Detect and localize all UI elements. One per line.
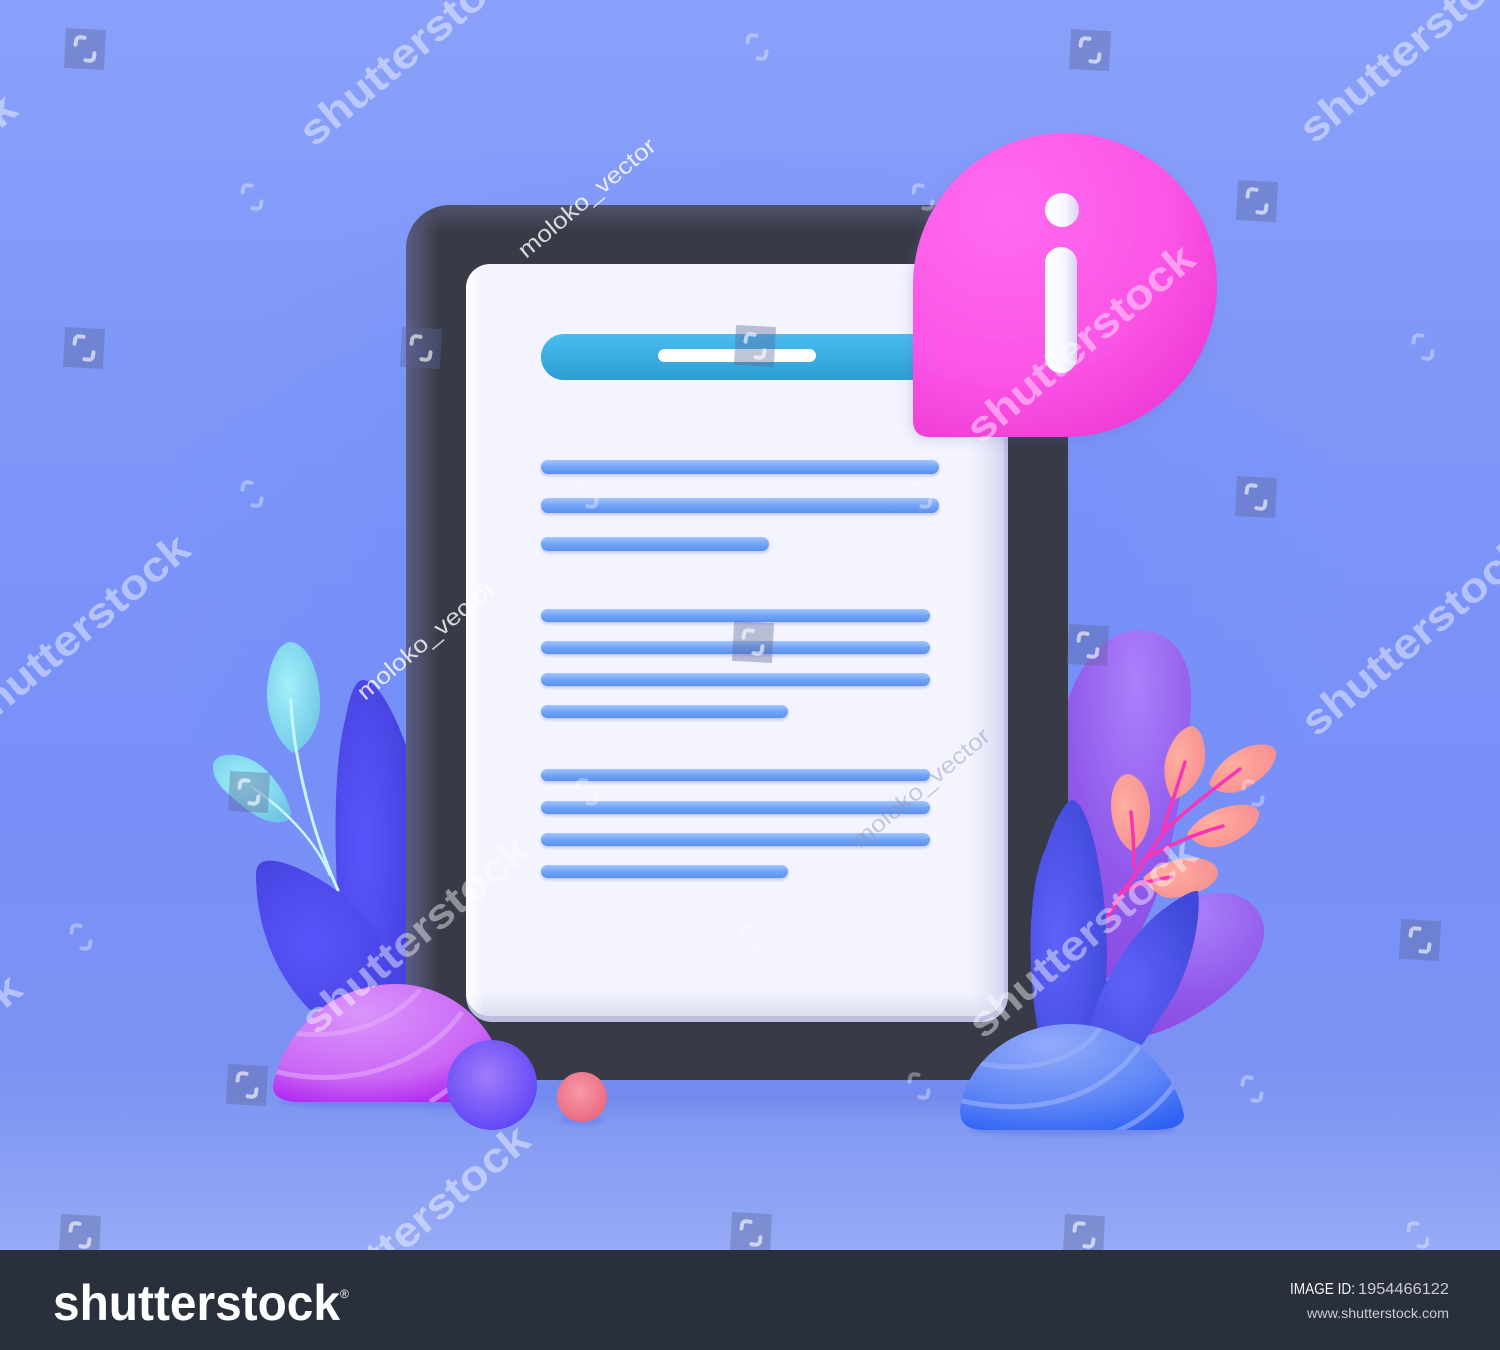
pink branch: [1108, 726, 1276, 917]
icon: letter i stem: [1045, 247, 1077, 373]
blue leaf tilted: [1090, 891, 1199, 1045]
text lines block 3: [541, 769, 930, 878]
tablet frame: [406, 205, 1068, 1080]
moloko_vector watermark text: moloko_vector: [513, 132, 661, 263]
blue rock: [958, 1024, 1184, 1136]
cyan leaf left: [213, 755, 291, 822]
shutterstock watermark text: shutterstock: [959, 829, 1206, 1047]
shutterstock watermark text: shutterstock: [292, 1115, 539, 1333]
left plant: [213, 642, 395, 1010]
left tall blue leaf: [336, 680, 406, 985]
shutterstock watermark text: shutterstock: [292, 825, 539, 1043]
salmon leaves: [1111, 726, 1276, 898]
image id number: 1954466122: [1358, 1281, 1449, 1298]
right plant: [1031, 630, 1276, 1045]
image id label: IMAGE ID:: [1290, 1281, 1355, 1298]
moloko_vector watermark text: [352, 132, 995, 853]
purple rock: [270, 984, 492, 1109]
header bar: [541, 334, 941, 380]
branch stems: [1108, 762, 1240, 917]
text lines block 2: [541, 609, 930, 718]
moloko_vector watermark text: moloko_vector: [352, 574, 500, 705]
registered mark: ®: [340, 1287, 349, 1301]
document paper: [466, 264, 1008, 1022]
floor shadow: [430, 1078, 1070, 1108]
moloko_vector watermark text: moloko_vector: [847, 722, 995, 853]
icon: letter i dot: [1045, 193, 1079, 227]
purple ball: [447, 1040, 537, 1130]
lower blue leaf: [256, 861, 395, 1010]
blue leaf tall: [1031, 800, 1107, 1030]
purple leaf right: [1105, 893, 1264, 1035]
pink ball: [557, 1072, 607, 1125]
footer logo: shutterstock: [53, 1275, 340, 1331]
shutterstock watermark text: shutterstock: [957, 234, 1204, 452]
text lines block 1: [541, 460, 939, 551]
footer bar: [0, 1250, 1500, 1350]
website: www.shutterstock.com: [1306, 1305, 1449, 1321]
purple leaf tall: [1068, 630, 1191, 980]
info speech bubble: [913, 133, 1217, 437]
cyan stems: [252, 700, 338, 890]
cyan leaf top: [267, 642, 320, 753]
